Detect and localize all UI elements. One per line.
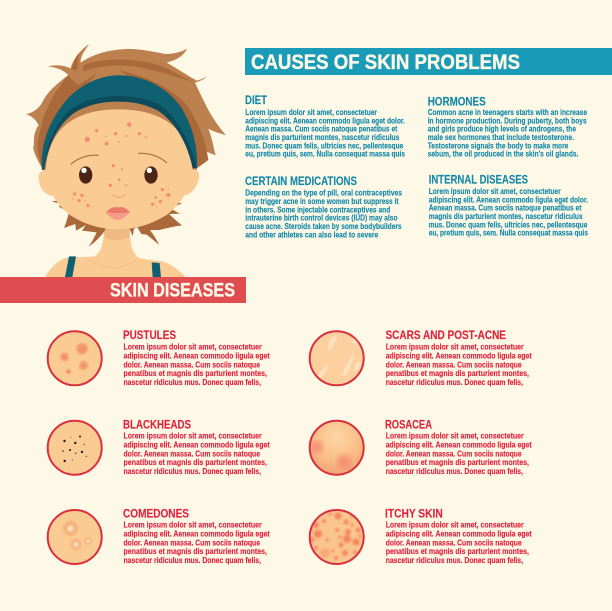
text block: certain medications: cause acne. Steroids taken by some bodybuilders xyxy=(245,222,402,231)
text block: comedones: nascetur ridiculus mus. Donec quam felis, xyxy=(124,555,261,565)
text block: pustules xyxy=(123,330,270,387)
text block: rosacea: adipiscing elit. Aenean commodo ligula eget xyxy=(386,440,532,450)
text block: itchy skin: nascetur ridiculus mus. Donec quam felis, xyxy=(386,555,523,565)
text block: itchy skin: dolor. Aenean massa. Cum sociis natoque xyxy=(386,537,522,547)
text block: diet: DIET xyxy=(245,95,267,107)
text block: rosacea: dolor. Aenean massa. Cum sociis natoque xyxy=(386,448,522,458)
text block: itchy skin: penatibus et magnis dis parturient montes, xyxy=(386,546,529,556)
text block: pustules: adipiscing elit. Aenean commodo ligula eget xyxy=(124,350,270,360)
text block: internal diseases: INTERNAL DISEASES xyxy=(429,174,528,186)
icon: pustules xyxy=(48,331,102,385)
shoulders and neck xyxy=(45,227,185,277)
text block: scars and post-acne: adipiscing elit. Aenean commodo ligula eget xyxy=(386,350,532,360)
text block: pustules: nascetur ridiculus mus. Donec quam felis, xyxy=(124,377,261,387)
acne spots xyxy=(72,122,170,207)
text block: scars and post-acne: SCARS AND POST-ACNE xyxy=(386,330,506,342)
icon: comedones xyxy=(48,510,102,564)
text block: certain medications: intrauterine birth control devices (IUD) may also xyxy=(245,214,398,223)
text block: blackheads: penatibus et magnis dis parturient montes, xyxy=(124,457,267,467)
text block: diet: magnis dis parturient montes, nascetur ridiculus xyxy=(245,133,400,142)
text block: diet: Aenean massa. Cum sociis natoque penatibus et xyxy=(245,125,398,134)
text block: comedones: penatibus et magnis dis parturient montes, xyxy=(124,546,267,556)
text block: certain medications: in others. Some injectable contraceptives and xyxy=(245,205,390,214)
text block: scars and post-acne: penatibus et magnis dis parturient montes, xyxy=(386,368,529,378)
text block: hormones: and girls produce high levels of androgens, the xyxy=(428,125,576,134)
text block: scars and post-acne: nascetur ridiculus mus. Donec quam felis, xyxy=(386,377,523,387)
text block: pustules: penatibus et magnis dis parturient montes, xyxy=(124,368,267,378)
text block: rosacea: nascetur ridiculus mus. Donec quam felis, xyxy=(386,466,523,476)
nose xyxy=(112,195,125,197)
icon: rosacea xyxy=(310,421,364,475)
text block: diet xyxy=(245,95,405,159)
text block: diet: mus. Donec quam felis, ultricies nec, pellentesque xyxy=(245,141,404,150)
banner: skin diseases xyxy=(0,277,246,303)
text block: pustules: dolor. Aenean massa. Cum sociis natoque xyxy=(124,359,260,369)
banner: causes of skin problems: CAUSES OF SKIN PROBLEMS xyxy=(251,51,520,74)
text block: itchy skin: adipiscing elit. Aenean commodo ligula eget xyxy=(386,528,532,538)
text block: blackheads xyxy=(123,419,270,476)
text block: rosacea: penatibus et magnis dis parturient montes, xyxy=(386,457,529,467)
text block: internal diseases: magnis dis parturient montes, nascetur ridiculus xyxy=(429,212,583,221)
text block: hormones xyxy=(428,96,587,159)
face xyxy=(46,109,193,229)
text block: hormones: HORMONES xyxy=(428,96,486,108)
lips xyxy=(106,207,130,220)
text block: comedones: COMEDONES xyxy=(123,509,189,521)
text block: comedones: Lorem ipsum dolor sit amet, consectetuer xyxy=(124,520,262,530)
icon: itchy skin xyxy=(310,510,364,564)
text block: blackheads: adipiscing elit. Aenean commodo ligula eget xyxy=(124,440,270,450)
text block: comedones xyxy=(123,509,270,565)
text block: blackheads: Lorem ipsum dolor sit amet, consectetuer xyxy=(124,431,262,441)
text block: certain medications: CERTAIN MEDICATIONS xyxy=(245,176,357,188)
text block: hormones: sebum, the oil produced in the skin's oil glands. xyxy=(428,150,578,159)
text block: certain medications: may trigger acne in some women but suppress it xyxy=(245,197,399,206)
text block: scars and post-acne: Lorem ipsum dolor sit amet, consectetuer xyxy=(386,342,524,352)
text block: diet: eu, pretium quis, sem. Nulla consequat massa quis xyxy=(245,150,405,159)
text block: certain medications: Depending on the type of pill, oral contraceptives xyxy=(245,189,402,198)
lower hair xyxy=(52,197,182,247)
text block: pustules: Lorem ipsum dolor sit amet, consectetuer xyxy=(124,342,262,352)
text block: scars and post-acne xyxy=(386,330,532,387)
text block: diet: Lorem ipsum dolor sit amet, consectetuer xyxy=(245,108,377,117)
text block: itchy skin: Lorem ipsum dolor sit amet, consectetuer xyxy=(386,520,524,530)
eyebrows xyxy=(71,153,167,164)
text block: blackheads: BLACKHEADS xyxy=(123,419,191,431)
text block: rosacea: ROSACEA xyxy=(385,419,432,431)
text block: pustules: PUSTULES xyxy=(123,330,176,342)
illustration: girl with acne xyxy=(26,44,226,277)
ears xyxy=(39,168,199,196)
text block: comedones: dolor. Aenean massa. Cum sociis natoque xyxy=(124,537,260,547)
text block: hormones: male sex hormones that include testosterone. xyxy=(428,133,574,142)
text block: internal diseases: Lorem ipsum dolor sit amet, consectetuer xyxy=(429,187,561,196)
text block: internal diseases: Aenean massa. Cum sociis natoque penatibus et xyxy=(429,204,582,213)
text block: itchy skin xyxy=(385,509,532,565)
eyes xyxy=(79,166,158,184)
text block: diet: adipiscing elit. Aenean commodo ligula eget dolor. xyxy=(245,116,405,125)
text block: itchy skin: ITCHY SKIN xyxy=(385,509,443,521)
text block: rosacea: Lorem ipsum dolor sit amet, consectetuer xyxy=(386,431,524,441)
text block: blackheads: nascetur ridiculus mus. Donec quam felis, xyxy=(124,466,261,476)
text block: comedones: adipiscing elit. Aenean commodo ligula eget xyxy=(124,528,270,538)
text block: certain medications xyxy=(245,176,402,239)
back hair xyxy=(26,44,226,170)
text block: certain medications: and other athletes can also lead to severe xyxy=(245,230,379,239)
text block: blackheads: dolor. Aenean massa. Cum sociis natoque xyxy=(124,448,260,458)
hair shading xyxy=(37,53,208,168)
icon: scars and post-acne xyxy=(310,331,364,385)
hair fringe xyxy=(45,100,194,170)
text block: hormones: Testosterone signals the body to make more xyxy=(428,141,569,150)
icon: blackheads xyxy=(48,421,102,475)
banner: skin diseases: SKIN DISEASES xyxy=(110,280,235,302)
text block: scars and post-acne: dolor. Aenean massa. Cum sociis natoque xyxy=(386,359,522,369)
text block: rosacea xyxy=(385,419,532,476)
text block: internal diseases xyxy=(429,174,588,238)
headband xyxy=(42,75,197,170)
